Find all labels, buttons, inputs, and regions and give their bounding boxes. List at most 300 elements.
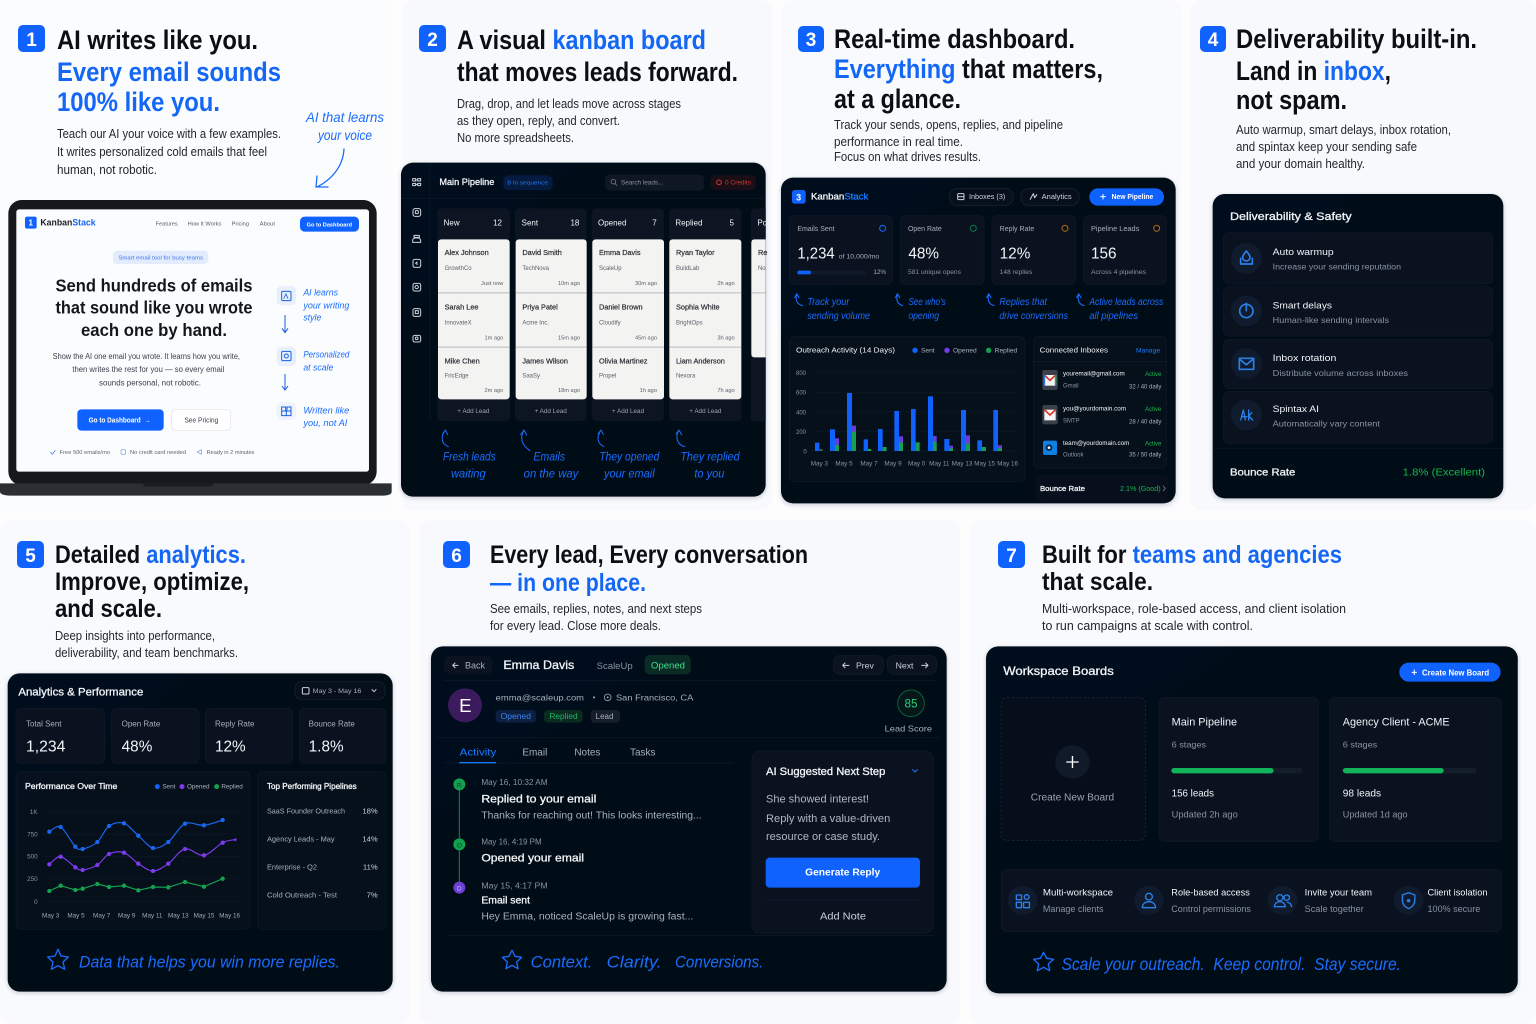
line chart: performance over time: 750	[27, 831, 38, 838]
top performing pipelines: 14%	[362, 835, 378, 844]
title	[457, 25, 738, 87]
board header: 0 Credits	[725, 180, 751, 186]
line chart: performance over time: May 16	[219, 912, 241, 919]
badge 6	[443, 541, 470, 568]
top performing pipelines: 7%	[367, 891, 378, 900]
connected inboxes	[1033, 337, 1167, 468]
trust row: Free 500 emails/mo	[60, 450, 110, 456]
stat: reply rate	[992, 216, 1076, 284]
tagline: Data that helps you win more replies.	[79, 952, 340, 971]
stat: reply rate: 148 replies	[1000, 269, 1032, 276]
line chart: performance over time: Performance Over Time	[25, 782, 118, 791]
laptop headline: that sound like you wrote	[55, 298, 253, 318]
body text: deliverability, and team benchmarks.	[55, 646, 238, 660]
stat: pipeline leads: Pipeline Leads	[1091, 226, 1140, 233]
column: Sent: 10m ago	[558, 281, 580, 287]
header: step 5	[17, 541, 249, 660]
badge 2	[419, 25, 446, 52]
activity timeline: May 16, 4:19 PM	[481, 837, 542, 846]
feature: role-based access	[1134, 886, 1251, 915]
panel title: Deliverability & Safety	[1230, 211, 1352, 223]
top performing pipelines: 11%	[363, 863, 378, 872]
bar chart: outreach activity: May 9	[884, 461, 902, 468]
laptop mockup	[0, 200, 392, 496]
side steps: Written like	[303, 405, 349, 415]
panel title: Analytics & Performance	[18, 686, 143, 698]
body text: See emails, replies, notes, and next steps	[490, 602, 702, 616]
lead top bar: Emma Davis	[503, 659, 575, 672]
feature: role-based access: Role-based access	[1171, 888, 1250, 898]
bar chart: outreach activity: May 5	[835, 461, 853, 468]
connected inboxes: Connected Inboxes	[1040, 346, 1108, 355]
stat: emails sent: of 10,000/mo	[839, 253, 880, 260]
laptop headline: Send hundreds of emails	[55, 275, 252, 295]
body text: for every lead. Close more deals.	[490, 619, 661, 633]
title: 100% like you.	[57, 87, 220, 117]
top performing pipelines: Agency Leads - May	[267, 837, 335, 844]
panel title: Workspace Boards	[1003, 664, 1114, 678]
line chart: performance over time: May 7	[93, 912, 111, 919]
nav button: Go to Dashboard	[307, 222, 353, 228]
handwritten captions	[443, 450, 740, 481]
board header: Main Pipeline	[439, 177, 494, 187]
header: step 7	[998, 541, 1346, 633]
dashboard top bar: New Pipeline	[1112, 194, 1153, 201]
line chart: performance over time: May 15	[194, 912, 215, 919]
ai suggestion card: resource or case study.	[766, 831, 880, 843]
handwritten stat notes: sending volume	[807, 311, 870, 322]
laptop sub text: then writes the rest for you — so every email	[72, 365, 225, 374]
handwritten stat notes: Track your	[807, 297, 850, 308]
connected inboxes: Manage	[1136, 347, 1160, 354]
feature: multi-workspace: Multi-workspace	[1043, 888, 1113, 898]
badge 4	[1200, 26, 1226, 52]
column: Opened: Olivia Martinez	[599, 356, 648, 365]
bar chart: outreach activity	[789, 337, 1025, 482]
connected inboxes: Active	[1145, 372, 1162, 378]
body text	[457, 97, 681, 145]
body text	[1042, 602, 1346, 633]
activity timeline: R	[457, 782, 462, 789]
handwritten arrows	[442, 430, 685, 451]
row: smart delays: Human-like sending intervals	[1273, 315, 1389, 325]
header: step 2	[419, 25, 738, 145]
column: Sent: TechNova	[522, 266, 550, 272]
panel: lead detail	[431, 646, 947, 992]
column: Sent: 18m ago	[558, 388, 580, 394]
lead profile: San Francisco, CA	[616, 692, 694, 702]
title: at a glance.	[834, 84, 961, 114]
badge 7: 7	[1006, 546, 1017, 567]
board header: 8 In sequence	[507, 180, 548, 186]
activity timeline	[453, 778, 702, 923]
stat: open rate: 48%	[908, 246, 939, 263]
column: New: Just now	[481, 281, 504, 287]
body text: and your domain healthy.	[1236, 157, 1365, 171]
side steps	[277, 286, 350, 428]
stat: bounce rate: 1.8%	[309, 739, 344, 756]
row: inbox rotation	[1223, 339, 1493, 389]
connected inboxes: Outlook	[1063, 453, 1084, 459]
stat: pipeline leads: 156	[1091, 246, 1117, 263]
ai suggestion card: Reply with a value-driven	[766, 813, 890, 825]
column: Sent: Acme Inc.	[522, 320, 549, 326]
column: Opened: 7	[652, 219, 657, 228]
feature strip	[1001, 869, 1502, 932]
column: Replied: BrightOps	[676, 320, 703, 326]
body text	[490, 602, 702, 633]
body text: Multi-workspace, role-based access, and client isolation	[1042, 602, 1346, 616]
column: clipped	[751, 208, 768, 421]
panel: workspace boards	[986, 646, 1518, 993]
body text: to run campaigns at scale with control.	[1042, 619, 1253, 633]
column: Opened: Propel	[599, 373, 616, 379]
title: that moves leads forward.	[457, 57, 738, 87]
column: Opened	[592, 208, 664, 421]
stat: open rate	[900, 216, 984, 284]
stat: pipeline leads: Across 4 pipelines	[1091, 269, 1146, 276]
column: Opened: + Add Lead	[612, 408, 645, 415]
stat: open rate: 48%	[122, 739, 153, 756]
nav: Features	[156, 221, 178, 227]
lead score: 85	[905, 698, 917, 711]
title	[57, 25, 281, 117]
card: main pipeline: Main Pipeline	[1172, 717, 1237, 729]
bounce rate	[1213, 449, 1503, 479]
connected inboxes: youremail@gmail.com	[1063, 371, 1125, 377]
lead profile: Opened	[501, 712, 531, 721]
stat: emails sent: 1,234	[797, 246, 835, 263]
create button: Create New Board	[1422, 668, 1489, 677]
side steps: AI learns	[302, 287, 338, 297]
activity timeline: Hey Emma, noticed ScaleUp is growing fast...	[481, 912, 693, 923]
side steps: your writing	[302, 301, 350, 311]
activity timeline: May 15, 4:17 PM	[481, 881, 548, 890]
stat: reply rate: 12%	[1000, 246, 1031, 263]
column: clipped: No	[758, 266, 766, 272]
connected inboxes: SMTP	[1063, 418, 1080, 424]
column: clipped: Po	[757, 219, 768, 228]
top performing pipelines: Top Performing Pipelines	[267, 782, 357, 791]
column: Replied: 3h ago	[717, 335, 735, 341]
nav button	[300, 217, 359, 232]
ai suggestion card: She showed interest!	[766, 794, 869, 806]
stat: pipeline leads	[1084, 216, 1167, 284]
column: New: 1m ago	[484, 335, 503, 341]
feature: client isolation: Client isolation	[1428, 888, 1487, 898]
nav: How It Works	[188, 221, 221, 227]
bar chart: outreach activity: May 11	[929, 461, 950, 468]
activity timeline: Opened your email	[481, 853, 584, 865]
column: Replied: Sophia White	[676, 302, 720, 311]
connected inboxes: Gmail	[1063, 384, 1079, 390]
handwritten note: your voice	[317, 127, 372, 143]
bounce rate row: 2.1% (Good)	[1120, 484, 1161, 493]
body text: Teach our AI your voice with a few examples.	[57, 127, 281, 141]
title: Everything that matters,	[834, 54, 1103, 84]
card: main pipeline	[1159, 697, 1318, 842]
card: agency client: 98 leads	[1343, 789, 1381, 800]
column: Opened: Cloudify	[599, 320, 621, 326]
column: Opened: ScaleUp	[599, 266, 622, 272]
stat: bounce rate	[299, 708, 386, 763]
tagline	[502, 950, 763, 972]
dashboard top bar: KanbanStack	[811, 191, 869, 201]
top performing pipelines: Cold Outreach - Test	[267, 893, 337, 900]
connected inboxes: Active	[1145, 442, 1162, 448]
bar chart: outreach activity: May 3	[811, 461, 828, 468]
pill: Smart email tool for busy teams	[118, 255, 203, 261]
bar chart: outreach activity: May 0	[908, 461, 926, 468]
handwritten stat notes: See who's	[908, 297, 946, 308]
feature: invite team: Invite your team	[1305, 888, 1372, 898]
card: main pipeline: 156 leads	[1172, 789, 1214, 800]
title	[834, 24, 1103, 114]
column: Replied: BuildLab	[676, 266, 700, 272]
lead profile	[448, 688, 694, 723]
panel: dashboard	[781, 178, 1176, 503]
lead top bar: Opened	[651, 660, 685, 670]
title: Land in inbox,	[1236, 56, 1391, 86]
handwritten stat notes: all pipelines	[1089, 311, 1138, 322]
title: Every email sounds	[57, 57, 281, 87]
top performing pipelines: SaaS Founder Outreach	[267, 809, 345, 816]
feature: role-based access: Control permissions	[1171, 904, 1251, 914]
handwritten stat notes: drive conversions	[999, 311, 1068, 322]
stat: total sent: 1,234	[26, 739, 66, 756]
handwritten captions: your email	[603, 467, 655, 481]
title: A visual kanban board	[457, 25, 706, 55]
connected inboxes: 28 / 40 daily	[1129, 419, 1161, 425]
row: smart delays: Smart delays	[1273, 300, 1332, 310]
nav: About	[260, 221, 275, 227]
laptop sub text: sounds personal, not robotic.	[99, 378, 201, 387]
bounce rate: Bounce Rate	[1230, 468, 1296, 479]
dashboard top bar: 3	[796, 192, 801, 202]
row: smart delays	[1223, 287, 1493, 336]
body text: Auto warmup, smart delays, inbox rotation,	[1236, 123, 1451, 137]
title: Built for teams and agencies	[1042, 541, 1342, 569]
connected inboxes: 32 / 40 daily	[1129, 385, 1161, 391]
connected inboxes: Active	[1145, 407, 1162, 413]
column: New: GrowthCo	[445, 266, 472, 272]
body text: No more spreadsheets.	[457, 131, 574, 145]
column: Sent: 15m ago	[558, 335, 580, 341]
handwritten captions: They replied	[680, 450, 740, 464]
row: spintax	[1223, 391, 1493, 443]
stat: open rate: 581 unique opens	[908, 269, 961, 276]
header: step 4	[1200, 24, 1477, 171]
dashboard top bar	[792, 188, 1164, 206]
body text	[1236, 123, 1451, 171]
arrow	[316, 149, 344, 187]
board header	[413, 175, 756, 191]
title: Detailed analytics.	[55, 541, 246, 569]
column: Opened: Daniel Brown	[599, 302, 643, 311]
column: New: InnovateX	[445, 320, 472, 326]
handwritten captions: They opened	[599, 450, 660, 464]
column: Replied: 5	[730, 219, 735, 228]
title: not spam.	[1236, 85, 1347, 115]
lead top bar: Prev	[856, 660, 874, 670]
panel: deliverability	[1213, 194, 1503, 498]
bar chart: outreach activity: 400	[796, 410, 807, 416]
row: auto warmup: Auto warmup	[1273, 247, 1334, 257]
lead score: Lead Score	[885, 723, 932, 733]
tabs	[444, 747, 733, 763]
row: spintax: Spintax AI	[1273, 404, 1319, 414]
body text: as they open, reply, and convert.	[457, 114, 620, 128]
title: AI writes like you.	[57, 25, 258, 55]
card: agency client	[1329, 697, 1502, 842]
stat: bounce rate: Bounce Rate	[309, 720, 355, 729]
bar chart: outreach activity: Sent	[921, 348, 935, 355]
line chart: performance over time: 0	[34, 899, 38, 906]
card: agency client: Updated 1d ago	[1343, 810, 1408, 820]
bar chart: outreach activity: May 13	[952, 461, 973, 468]
column: New: Sarah Lee	[445, 302, 478, 311]
bar chart: outreach activity: 800	[796, 371, 807, 377]
top performing pipelines: 18%	[362, 807, 378, 816]
column: Opened: 1h ago	[640, 388, 657, 394]
feature: multi-workspace	[1008, 886, 1113, 915]
line chart: performance over time: Replied	[221, 784, 243, 791]
column: New: Mike Chen	[445, 356, 480, 365]
stat: reply rate: Reply Rate	[1000, 226, 1034, 233]
stat: total sent: Total Sent	[26, 720, 62, 729]
card: agency client: 6 stages	[1343, 740, 1378, 750]
cta buttons: Go to Dashboard →	[89, 418, 151, 425]
date picker	[295, 682, 385, 699]
column: Replied	[669, 208, 742, 421]
panel: analytics	[8, 673, 393, 992]
column: New	[437, 208, 510, 421]
panel: kanban board	[401, 163, 768, 497]
row: inbox rotation: Distribute volume across inboxes	[1273, 368, 1408, 378]
connected inboxes: team@yourdomain.com	[1063, 441, 1129, 447]
column: Replied: Replied	[675, 219, 702, 228]
bar chart: outreach activity: Opened	[953, 348, 977, 355]
card: main pipeline: Updated 2h ago	[1172, 810, 1238, 820]
activity timeline: Email sent	[481, 896, 530, 907]
bar chart: outreach activity: 200	[796, 430, 807, 436]
stat: reply rate: 12%	[215, 739, 246, 756]
column: Sent: James Wilson	[522, 356, 568, 365]
tagline: Clarity.	[607, 953, 662, 972]
column: Sent: Sent	[522, 219, 539, 228]
lead profile: E	[459, 695, 472, 716]
top performing pipelines	[257, 772, 386, 929]
card: agency client: Agency Client - ACME	[1343, 717, 1450, 729]
badge 5: 5	[25, 546, 36, 567]
handwritten captions: to you	[694, 467, 725, 481]
title: — in one place.	[490, 569, 646, 597]
body text: Focus on what drives results.	[834, 150, 981, 164]
connected inboxes: you@yourdomain.com	[1063, 406, 1126, 412]
body text	[55, 629, 238, 660]
tabs: Notes	[574, 747, 600, 758]
body text: and spintax keep your sending safe	[1236, 140, 1417, 154]
column: Replied: Ryan Taylor	[676, 248, 715, 257]
badge 2: 2	[427, 30, 438, 51]
handwritten captions: on the way	[524, 467, 579, 481]
tagline: Context.	[531, 953, 592, 972]
line chart: performance over time: 250	[27, 876, 38, 883]
title	[1042, 541, 1342, 596]
line chart: performance over time: May 11	[142, 912, 163, 919]
column: Replied: 7h ago	[717, 388, 735, 394]
nav: Pricing	[232, 221, 249, 227]
bounce rate: 1.8% (Excellent)	[1403, 468, 1485, 479]
column: Sent: 18	[570, 219, 580, 228]
badge 6: 6	[451, 546, 462, 567]
connected inboxes: 35 / 50 daily	[1129, 453, 1161, 459]
activity timeline: Thanks for reaching out! This looks interesting...	[481, 811, 702, 822]
column: Opened: 30m ago	[635, 281, 657, 287]
bar chart: outreach activity: May 7	[860, 461, 878, 468]
laptop headline: each one by hand.	[81, 320, 227, 340]
header: step 1	[18, 25, 384, 187]
header: step 6	[443, 541, 808, 633]
body text: Drag, drop, and let leads move across stages	[457, 97, 681, 111]
row: auto warmup: Increase your sending reputation	[1273, 262, 1401, 272]
title	[490, 541, 808, 597]
ai suggestion card: Add Note	[820, 912, 866, 923]
sidebar icons	[413, 209, 421, 342]
tabs: Activity	[460, 747, 496, 758]
column: Opened: 45m ago	[635, 335, 657, 341]
side steps: at scale	[303, 362, 333, 372]
feature: client isolation: 100% secure	[1428, 904, 1480, 914]
tagline: Conversions.	[675, 953, 763, 972]
title: Improve, optimize,	[55, 568, 249, 596]
ai suggestion card	[752, 751, 933, 933]
pill	[113, 251, 208, 264]
row: spintax: Automatically vary content	[1273, 419, 1381, 429]
line chart: performance over time: Opened	[187, 784, 210, 791]
lead top bar: Back	[465, 661, 485, 671]
bar chart: outreach activity: 0	[803, 449, 807, 455]
handwritten note: AI that learns	[305, 109, 384, 125]
column: New: 12	[493, 219, 503, 228]
date picker: May 3 - May 16	[313, 688, 362, 695]
activity timeline: D	[457, 886, 462, 893]
feature: multi-workspace: Manage clients	[1043, 904, 1104, 914]
trust row	[50, 450, 254, 456]
activity timeline: O	[457, 842, 462, 849]
handwritten captions: waiting	[451, 467, 486, 481]
nav	[156, 221, 275, 227]
handwritten captions: Fresh leads	[443, 450, 496, 464]
stat: reply rate: Reply Rate	[215, 720, 255, 729]
tabs: Tasks	[630, 747, 656, 758]
card: create new	[1001, 697, 1145, 841]
column: Sent: + Add Lead	[535, 408, 567, 415]
logo	[25, 217, 96, 229]
line chart: performance over time: May 3	[42, 912, 60, 919]
side steps: you, not AI	[302, 418, 348, 428]
line chart: performance over time: 500	[27, 854, 38, 861]
row: auto warmup	[1223, 233, 1493, 284]
column: Sent: Priya Patel	[522, 302, 558, 311]
body text: human, not robotic.	[57, 163, 157, 177]
tabs: Email	[522, 747, 547, 758]
tagline: Scale your outreach. Keep control. Stay secure.	[1061, 954, 1401, 974]
column: Sent: David Smith	[522, 248, 562, 257]
board header: Search leads...	[621, 179, 664, 186]
dashboard top bar: Analytics	[1042, 194, 1072, 201]
column: New: Alex Johnson	[445, 248, 489, 257]
